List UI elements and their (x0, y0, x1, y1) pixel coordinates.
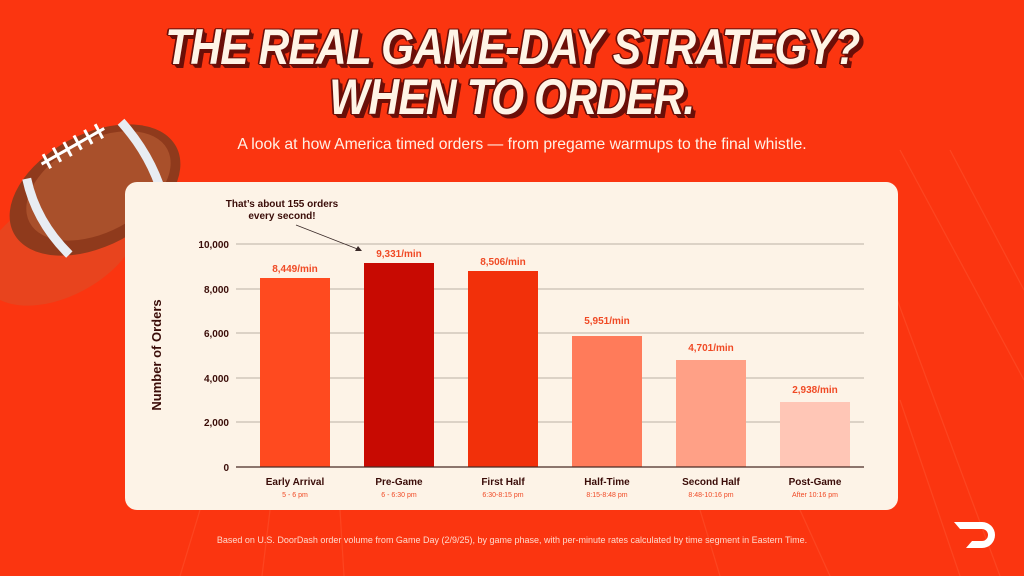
bar chart: 5 - 6 pm (282, 492, 308, 499)
bar chart: 0 (223, 463, 229, 474)
bar chart: 8,449/min (272, 264, 318, 275)
bar chart: First Half (481, 477, 525, 488)
bar chart: 8:48-10:16 pm (688, 492, 734, 499)
bar chart: 6:30-8:15 pm (482, 492, 524, 499)
bar chart: 6,000 (204, 329, 229, 340)
y axis title: Number of Orders (149, 299, 164, 411)
bar chart: Half-Time (584, 477, 630, 488)
bar chart: 6 - 6:30 pm (381, 492, 417, 499)
bar chart: 8,506/min (480, 257, 526, 268)
panel: chart (125, 182, 898, 510)
callout (226, 199, 362, 251)
callout: every second! (248, 211, 316, 222)
icon: doordash logo (954, 522, 995, 548)
bar chart: Early Arrival (266, 477, 324, 488)
icon: football (0, 118, 180, 306)
footnote: Based on U.S. DoorDash order volume from Game Day (2/9/25), by game phase, with per-minute rates calculated by time segment in Eastern Time. (217, 535, 807, 545)
bar chart: After 10:16 pm (792, 492, 838, 499)
bar chart: 2,000 (204, 418, 229, 429)
motion trail (0, 162, 159, 330)
bar chart: 8,000 (204, 285, 229, 296)
title: WHEN TO ORDER. (329, 69, 695, 125)
bar chart: Pre-Game (375, 477, 423, 488)
subtitle: A look at how America timed orders — from pregame warmups to the final whistle. (237, 136, 807, 153)
bar chart: 9,331/min (376, 249, 422, 260)
title (165, 19, 864, 125)
bar chart: Post-Game (789, 477, 842, 488)
bar chart: 5,951/min (584, 316, 630, 327)
bar chart: 8:15-8:48 pm (586, 492, 628, 499)
title: THE REAL GAME-DAY STRATEGY? (165, 19, 859, 75)
callout: That’s about 155 orders (226, 199, 339, 210)
bar chart: 2,938/min (792, 385, 838, 396)
bar chart: 4,701/min (688, 343, 734, 354)
bar chart: 10,000 (198, 240, 229, 251)
bar chart: 4,000 (204, 374, 229, 385)
bar chart: Second Half (682, 477, 741, 488)
